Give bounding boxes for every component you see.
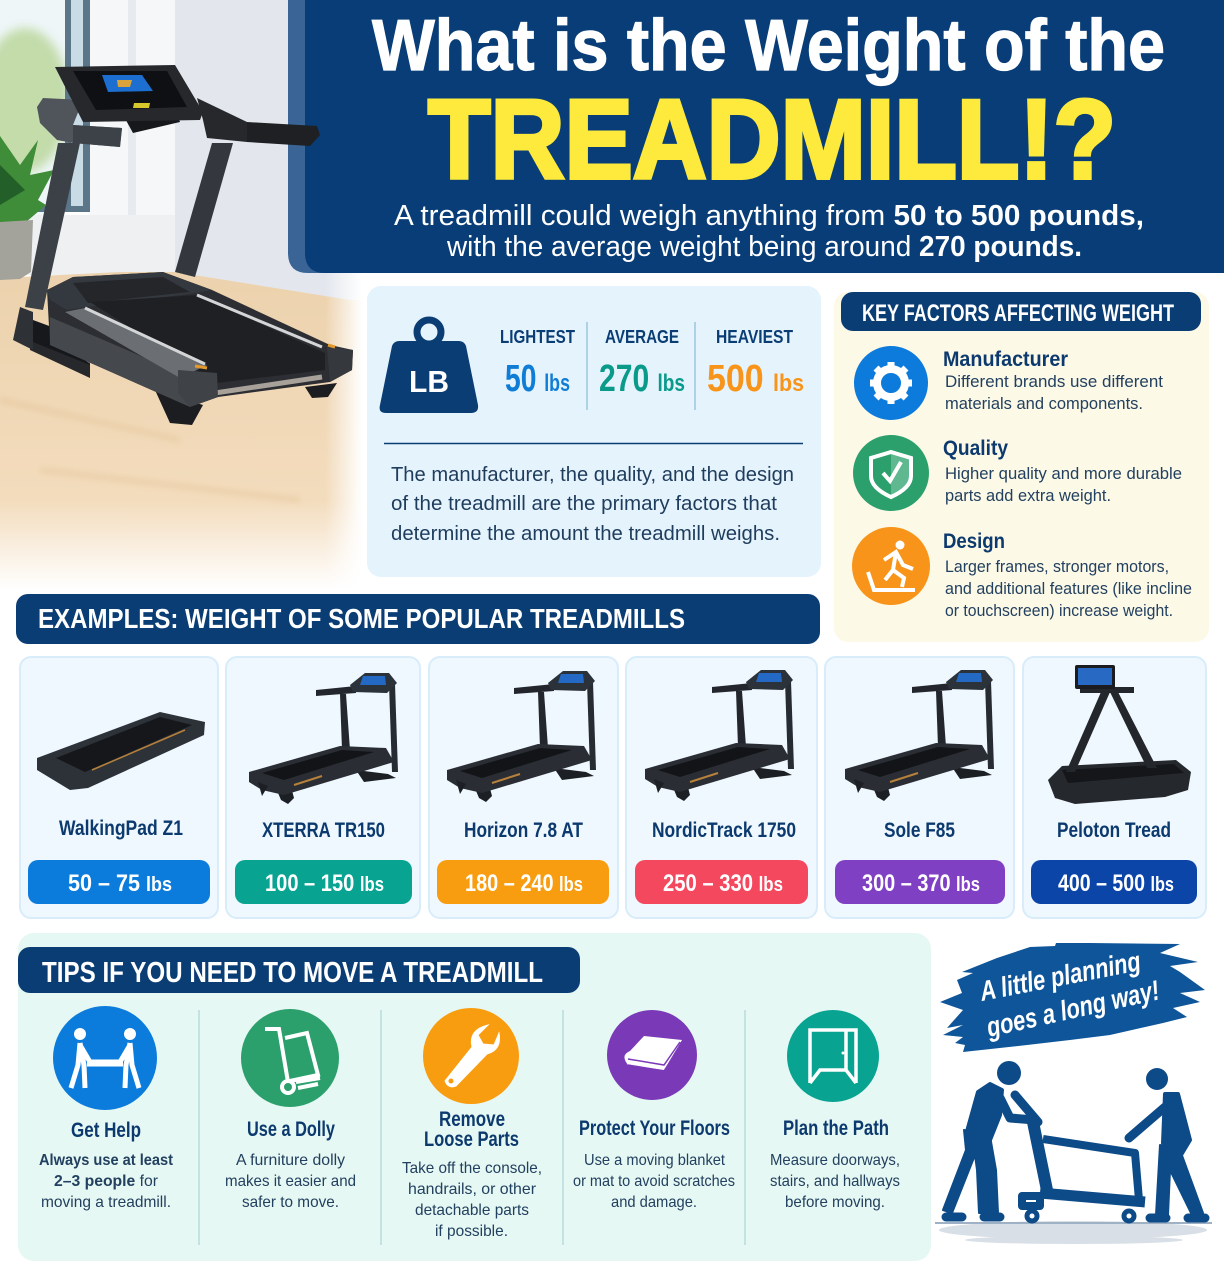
panel: weight range: [367, 286, 821, 577]
tip: plan the path: before moving.: [785, 1194, 885, 1211]
card: Peloton Tread: 400 – 500 lbs: [1058, 870, 1174, 897]
card: Peloton Tread: Peloton Tread: [1057, 819, 1171, 842]
factor: quality: parts add extra weight.: [945, 486, 1111, 505]
subtitle: with the average weight being around 270 pounds.: [446, 231, 1082, 263]
tip: remove loose parts: [402, 1008, 542, 1240]
tip: get help: moving a treadmill.: [41, 1194, 171, 1211]
panel: moving tips: [18, 933, 931, 1261]
tip: remove loose parts: Take off the console,: [402, 1160, 542, 1177]
card: XTERRA TR150: XTERRA TR150: [262, 819, 385, 842]
tip: remove loose parts: if possible.: [435, 1223, 508, 1240]
stat: average: [599, 327, 685, 400]
title line 1: What is the Weight of the: [372, 6, 1165, 86]
tip: protect your floors: and damage.: [611, 1194, 697, 1211]
card: Peloton Tread: [1023, 657, 1206, 918]
stat: heaviest: 500 lbs: [707, 358, 804, 400]
card: NordicTrack 1750: 250 – 330 lbs: [663, 870, 783, 897]
tip: use a dolly: [225, 1009, 356, 1211]
heading: tips: [18, 947, 580, 993]
card: XTERRA TR150: [226, 657, 420, 918]
card: XTERRA TR150: 100 – 150 lbs: [265, 870, 384, 897]
card: WalkingPad Z1: [20, 657, 218, 918]
subtitle: [394, 200, 1144, 263]
paragraph: [391, 464, 794, 545]
stat: average: AVERAGE: [605, 327, 679, 347]
cart: [1022, 1122, 1145, 1221]
factor: design: Larger frames, stronger motors,: [945, 557, 1169, 576]
card: NordicTrack 1750: NordicTrack 1750: [652, 819, 796, 842]
card: WalkingPad Z1: 50 – 75 lbs: [68, 870, 172, 897]
factor: design: and additional features (like incline: [945, 579, 1192, 598]
tip: use a dolly: Use a Dolly: [247, 1118, 335, 1141]
plant: [0, 136, 54, 280]
tip: get help: [39, 1006, 174, 1211]
tip: protect your floors: Protect Your Floors: [579, 1117, 730, 1140]
paragraph: The manufacturer, the quality, and the design: [391, 464, 794, 486]
factor: quality: Quality: [943, 437, 1008, 460]
header banner: [288, 0, 1224, 273]
tip: plan the path: stairs, and hallways: [770, 1173, 900, 1190]
factor: manufacturer: materials and components.: [945, 394, 1143, 413]
tip: remove loose parts: handrails, or other: [408, 1181, 537, 1198]
right person: [1129, 1068, 1205, 1218]
heading: examples: [16, 594, 820, 644]
factor: manufacturer: [854, 346, 1163, 420]
ground shadow: [935, 1221, 1212, 1244]
card: Horizon 7.8 AT: 180 – 240 lbs: [465, 870, 583, 897]
icon: weight LB: [380, 320, 478, 413]
card: WalkingPad Z1: WalkingPad Z1: [59, 817, 183, 840]
factor: design: or touchscreen) increase weight.: [945, 601, 1173, 620]
card: Sole F85: [825, 657, 1014, 918]
card: Horizon 7.8 AT: Horizon 7.8 AT: [464, 819, 583, 842]
paragraph: determine the amount the treadmill weighs.: [391, 523, 780, 545]
hero photo background: bright room: [0, 0, 362, 590]
tip: get help: 2–3 people for: [54, 1173, 159, 1190]
heading: tips: TIPS IF YOU NEED TO MOVE A TREADMILL: [42, 957, 543, 989]
factor: manufacturer: Manufacturer: [943, 348, 1068, 371]
tip: remove loose parts: Loose Parts: [424, 1128, 519, 1151]
tip: use a dolly: safer to move.: [242, 1194, 339, 1211]
card: NordicTrack 1750: [626, 657, 817, 918]
stat: heaviest: [707, 327, 804, 400]
tip: plan the path: Measure doorways,: [770, 1152, 900, 1169]
subtitle: A treadmill could weigh anything from 50 to 500 pounds,: [394, 200, 1144, 232]
card: Sole F85: Sole F85: [884, 819, 955, 842]
icon: weight LB: LB: [409, 364, 449, 399]
panel: key factors: [834, 292, 1209, 642]
stat: lightest: LIGHTEST: [500, 327, 575, 347]
tip: plan the path: [770, 1010, 900, 1211]
card: Horizon 7.8 AT: [429, 657, 618, 918]
heading: examples: EXAMPLES: WEIGHT OF SOME POPULAR TREADMILLS: [38, 603, 685, 634]
stat: average: 270 lbs: [599, 358, 685, 400]
illustration: two people moving a cart: [935, 1061, 1212, 1244]
callout: brush stroke slogan: goes a long way!: [983, 974, 1162, 1043]
tip: plan the path: Plan the Path: [783, 1117, 889, 1140]
paragraph: of the treadmill are the primary factors that: [391, 493, 777, 515]
heading: key factors: [841, 292, 1201, 331]
tip: protect your floors: Use a moving blanket: [584, 1152, 726, 1169]
treadmill photo: [13, 65, 353, 425]
stat: lightest: [500, 327, 575, 400]
tip: protect your floors: or mat to avoid scratches: [573, 1173, 735, 1190]
factor: design: Design: [943, 530, 1005, 553]
factor: quality: Higher quality and more durable: [945, 464, 1182, 483]
tip: use a dolly: A furniture dolly: [236, 1152, 345, 1169]
stat: heaviest: HEAVIEST: [716, 327, 793, 347]
factor: design: [852, 527, 1192, 620]
stat: lightest: 50 lbs: [505, 358, 570, 400]
tip: remove loose parts: Remove: [439, 1108, 505, 1131]
factor: manufacturer: Different brands use different: [945, 372, 1163, 391]
factor: quality: [853, 435, 1182, 511]
callout: brush stroke slogan: [940, 943, 1205, 1052]
tip: remove loose parts: detachable parts: [415, 1202, 529, 1219]
title line 2: TREADMILL!?: [428, 77, 1116, 202]
callout: brush stroke slogan: A little planning: [976, 945, 1143, 1007]
tip: protect your floors: [573, 1010, 735, 1211]
left person: [943, 1061, 1038, 1217]
tip: get help: Always use at least: [39, 1152, 174, 1169]
card: Sole F85: 300 – 370 lbs: [862, 870, 980, 897]
tip: use a dolly: makes it easier and: [225, 1173, 356, 1190]
tip: get help: Get Help: [71, 1119, 141, 1142]
